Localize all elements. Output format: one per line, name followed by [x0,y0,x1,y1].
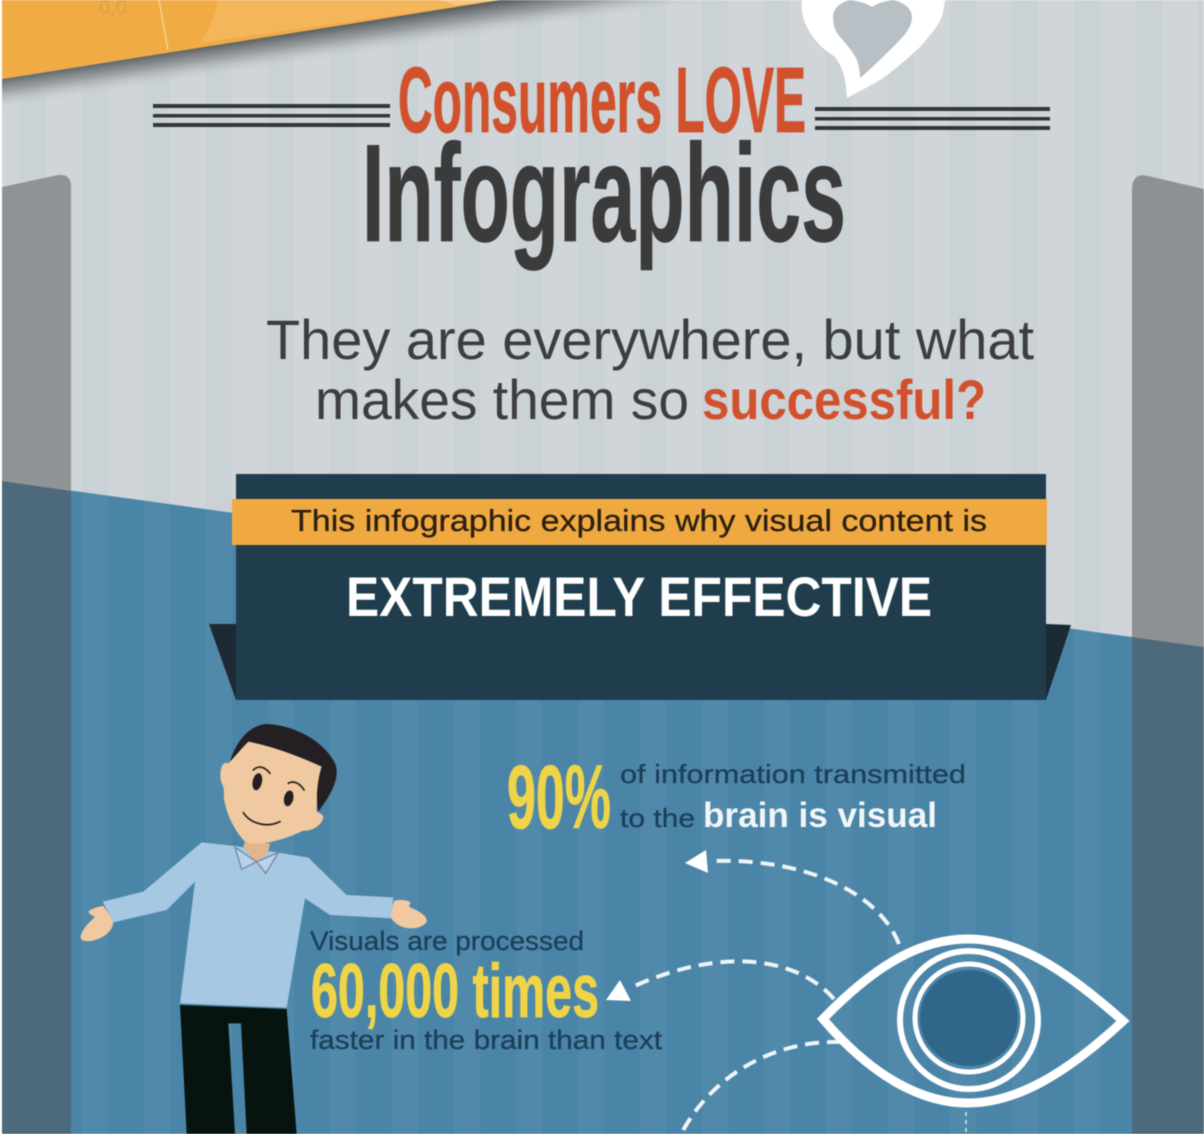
subtitle: successful? [702,368,986,431]
arrow: thin dotted line below eye [965,1112,967,1134]
trousers [180,1005,297,1134]
banner headline: EXTREMELY EFFECTIVE [346,565,932,628]
collar [235,847,278,873]
subtitle [266,308,1034,431]
eye outline [823,939,1123,1103]
title: Consumers LOVE: Consumers LOVE [398,48,806,152]
pupil [920,970,1018,1066]
inner iris ring [915,964,1023,1072]
orange chart band at top [2,0,500,79]
shadow under orange band [2,0,800,128]
stat: 90 percent: brain is visual [703,796,937,835]
sweater [103,842,393,1008]
orange strip [232,499,1047,545]
banner body [236,474,1046,700]
background: blue lower section [2,481,1204,1134]
left hand [81,906,113,941]
stat: 60,000 times: Visuals are processed [310,926,584,956]
stat: 60,000 times: 60,000 times [311,949,599,1034]
outer iris ring [900,951,1038,1089]
arrow: eye to 60,000 times [606,961,834,1001]
subtitle: makes them so [315,368,689,431]
arrow: eye to 90 percent [685,850,899,944]
stat: 60,000 times [310,926,663,1055]
ribbon tails [209,624,1071,700]
title: Infographics: Infographics [362,116,846,271]
stat: 90 percent: of information transmitted [620,759,966,789]
icon: eye [823,939,1123,1103]
right side column [1132,175,1204,1134]
right hand [391,900,427,928]
eyes and smile [243,767,304,825]
neck [243,842,270,863]
icon: heart speech bubble [802,0,945,98]
hair [230,724,337,812]
face [220,742,323,844]
stat: 90 percent [507,748,966,848]
title lines right [815,107,1050,130]
subtitle: They are everywhere, but what [266,308,1034,371]
stat: 90 percent: to the [620,803,695,833]
strip text: This infographic explains why visual content is [291,503,987,538]
stat: 90 percent: 90% [507,748,611,848]
title lines left [153,104,390,127]
background: gray upper section [2,0,1204,700]
stat: 60,000 times: faster in the brain than text [310,1025,663,1055]
banner [209,474,1071,700]
left side column [2,175,71,1134]
character: man shrugging [81,724,427,1134]
arrow: eye curving downward [681,1042,841,1134]
